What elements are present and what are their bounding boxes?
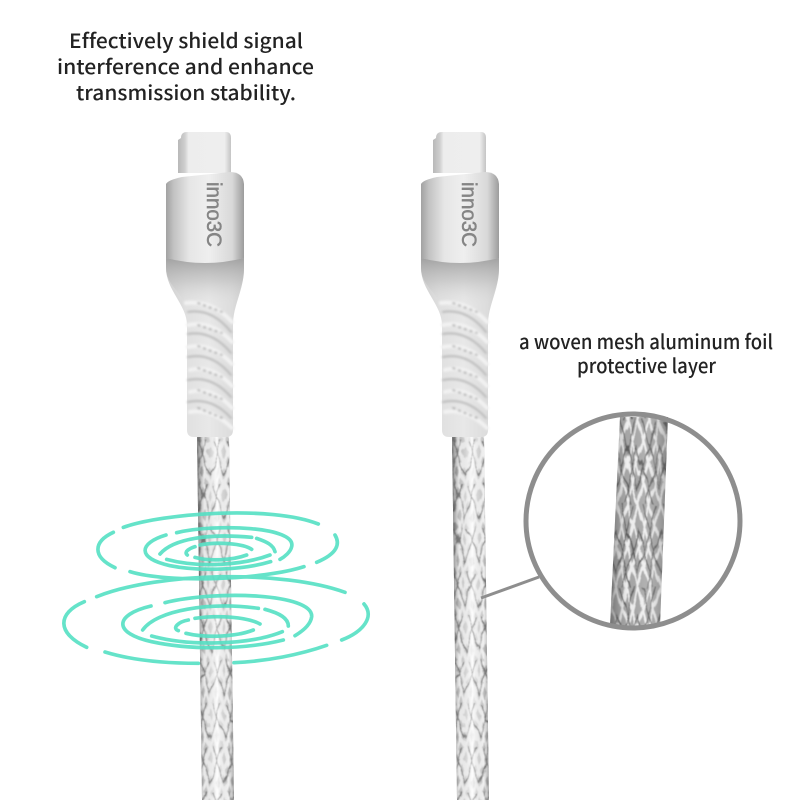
right USB-C cable — [421, 132, 500, 800]
magnifier callout: woven mesh close-up — [481, 405, 740, 637]
callout: mesh description: protective layer — [577, 350, 717, 379]
pointer line — [481, 577, 539, 598]
signal interference waves — [64, 513, 368, 663]
right USB-C cable: inno3C — [457, 182, 480, 247]
title: shielding caption — [57, 25, 314, 106]
zoomed mesh cable — [610, 417, 668, 626]
upper wave rings — [98, 513, 337, 579]
title: shielding caption: transmission stability. — [76, 77, 296, 106]
left USB-C cable: inno3C — [202, 182, 225, 247]
title: shielding caption: interference and enhance — [57, 51, 314, 80]
title: shielding caption: Effectively shield signal — [69, 25, 303, 54]
callout: mesh description — [519, 326, 773, 379]
lower wave rings — [64, 577, 368, 663]
left USB-C cable — [166, 132, 245, 800]
magnifier ring — [526, 414, 740, 628]
callout: mesh description: a woven mesh aluminum foil — [519, 326, 773, 355]
